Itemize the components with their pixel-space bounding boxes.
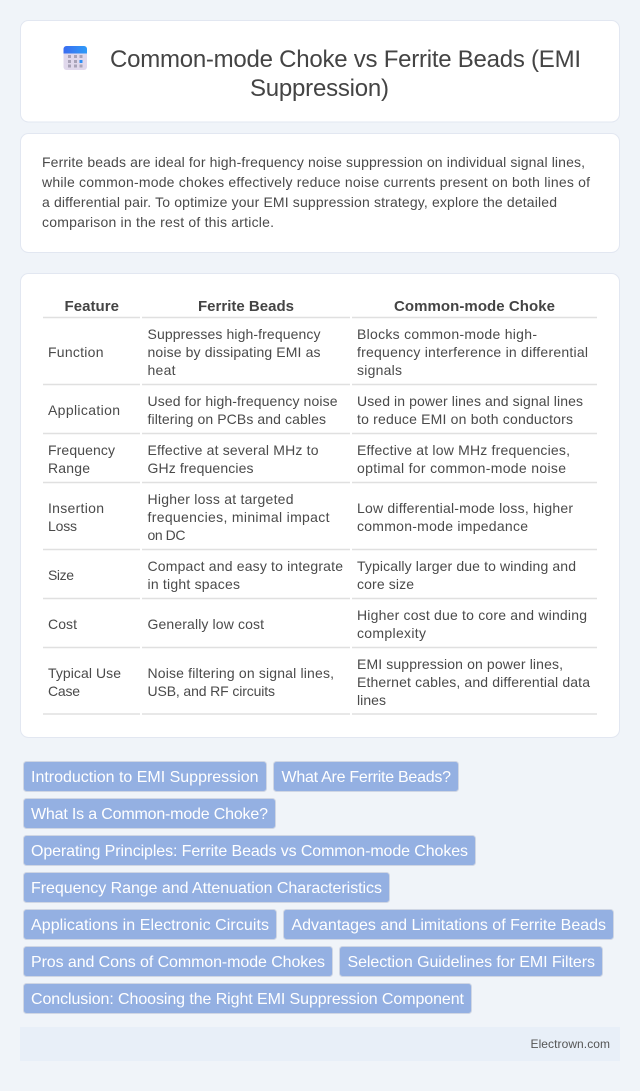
intro text [41, 154, 590, 230]
table row: Insertion Loss: frequencies, minimal impact [148, 509, 330, 525]
table row: Typical Use Case: lines [357, 692, 386, 708]
tag: Introduction: Introduction to EMI Suppression [31, 769, 258, 786]
table row: Frequency Range: Effective at low MHz frequencies, [357, 442, 570, 458]
table row: Function: Function [48, 344, 104, 360]
table row: Size: core size [357, 576, 414, 592]
tag: Introduction [24, 762, 266, 792]
tag: Operating Principles [24, 836, 476, 866]
table row: Typical Use Case: EMI suppression on power lines, [357, 656, 563, 672]
title [110, 46, 581, 102]
tag: Applications [24, 910, 276, 940]
table row: Insertion Loss: Higher loss at targeted [148, 491, 294, 507]
table row: Function: signals [357, 362, 402, 378]
table row: Function: heat [148, 362, 176, 378]
intro text: while common-mode chokes effectively reduce noise currents present on both lines of [41, 174, 590, 190]
table row: Application: Used for high-frequency noise [148, 393, 338, 409]
tag: Applications: Applications in Electronic Circuits [31, 917, 269, 934]
table row: Typical Use Case: Noise filtering on signal lines, [148, 665, 334, 681]
intro text: comparison in the rest of this article. [42, 214, 274, 230]
table row: Size: Compact and easy to integrate [148, 558, 343, 574]
table row: Function: Blocks common-mode high- [357, 326, 537, 342]
table row: Application: filtering on PCBs and cables [148, 411, 326, 427]
table row: Typical Use Case: Case [48, 683, 80, 699]
tag: What Are Ferrite Beads [274, 762, 458, 792]
table row: Cost: Higher cost due to core and winding [357, 607, 587, 623]
tag: Frequency Range: Frequency Range and Attenuation Characteristics [31, 880, 382, 897]
table row: Typical Use Case: Typical Use [48, 665, 121, 681]
intro text: Ferrite beads are ideal for high-frequency noise suppression on individual signal lines, [42, 154, 585, 170]
table row: Application [43, 393, 597, 434]
table row: Insertion Loss: common-mode impedance [357, 518, 528, 534]
table row: Insertion Loss [43, 491, 597, 550]
table row: Insertion Loss: Insertion [48, 500, 104, 516]
tag: Selection Guidelines [340, 946, 602, 976]
table row: Frequency Range [43, 442, 597, 482]
tag: Conclusion: Conclusion: Choosing the Right EMI Suppression Component [31, 991, 465, 1008]
panel: comparison table [20, 274, 620, 738]
panel: header [20, 20, 620, 122]
table row: Insertion Loss: Loss [48, 518, 77, 534]
footer [20, 1027, 620, 1061]
table header row: Ferrite Beads [198, 298, 294, 315]
table row: Insertion Loss: Low differential-mode loss, higher [357, 500, 573, 516]
icon: calendar [64, 46, 87, 70]
table header row: Common-mode Choke [394, 298, 555, 315]
table row: Function [43, 326, 597, 384]
tag: Pros and Cons [24, 946, 332, 976]
table row: Typical Use Case: Ethernet cables, and differential data [357, 674, 590, 690]
table row: Typical Use Case [43, 656, 597, 714]
table row: Cost: complexity [357, 625, 426, 641]
table row: Function: Suppresses high-frequency [148, 326, 320, 342]
title: Common-mode Choke vs Ferrite Beads (EMI [110, 46, 581, 73]
panel: introduction [20, 134, 620, 252]
table row: Frequency Range: Effective at several MHz to [148, 442, 319, 458]
table row: Cost [43, 607, 597, 648]
table header row: Feature [64, 298, 119, 315]
table row: Frequency Range: Frequency [48, 442, 115, 458]
intro text: a differential pair. To optimize your EMI suppression strategy, explore the detailed [42, 194, 557, 210]
table row: Insertion Loss: on DC [148, 527, 186, 543]
tag: What Are Ferrite Beads: What Are Ferrite Beads? [282, 769, 451, 786]
table row: Application: Application [48, 402, 120, 418]
footer: Electrown.com [530, 1037, 610, 1051]
table row: Size: in tight spaces [148, 576, 240, 592]
table row: Frequency Range: optimal for common-mode noise [357, 460, 566, 476]
tag: Frequency Range [24, 872, 390, 902]
tag: Advantages and Limitations: Advantages and Limitations of Ferrite Beads [292, 917, 606, 934]
tag: Conclusion [24, 984, 472, 1014]
table row: Function: noise by dissipating EMI as [148, 344, 320, 360]
table header row [43, 298, 597, 318]
tag: What Is a Common-mode Choke: What Is a Common-mode Choke? [31, 806, 268, 823]
table row: Frequency Range: Range [48, 460, 90, 476]
tag: What Is a Common-mode Choke [24, 798, 276, 828]
table row: Frequency Range: GHz frequencies [148, 460, 254, 476]
tag: Advantages and Limitations [284, 910, 614, 940]
table row: Size: Typically larger due to winding and [357, 558, 576, 574]
table row: Size [43, 558, 597, 598]
table row: Application: to reduce EMI on both conductors [357, 411, 573, 427]
table row: Application: Used in power lines and signal lines [357, 393, 583, 409]
tag: Pros and Cons: Pros and Cons of Common-mode Chokes [31, 954, 325, 971]
table row: Size: Size [48, 567, 74, 583]
title: Suppression) [250, 75, 389, 102]
table row: Cost: Generally low cost [148, 616, 264, 632]
tag: Operating Principles: Operating Principles: Ferrite Beads vs Common-mode Chokes [31, 843, 468, 860]
table row: Function: frequency interference in differential [357, 344, 588, 360]
tag: Selection Guidelines: Selection Guidelines for EMI Filters [348, 954, 595, 971]
panel: topic tags [24, 762, 614, 1014]
table row: Cost: Cost [48, 616, 77, 632]
table row: Typical Use Case: USB, and RF circuits [148, 683, 275, 699]
